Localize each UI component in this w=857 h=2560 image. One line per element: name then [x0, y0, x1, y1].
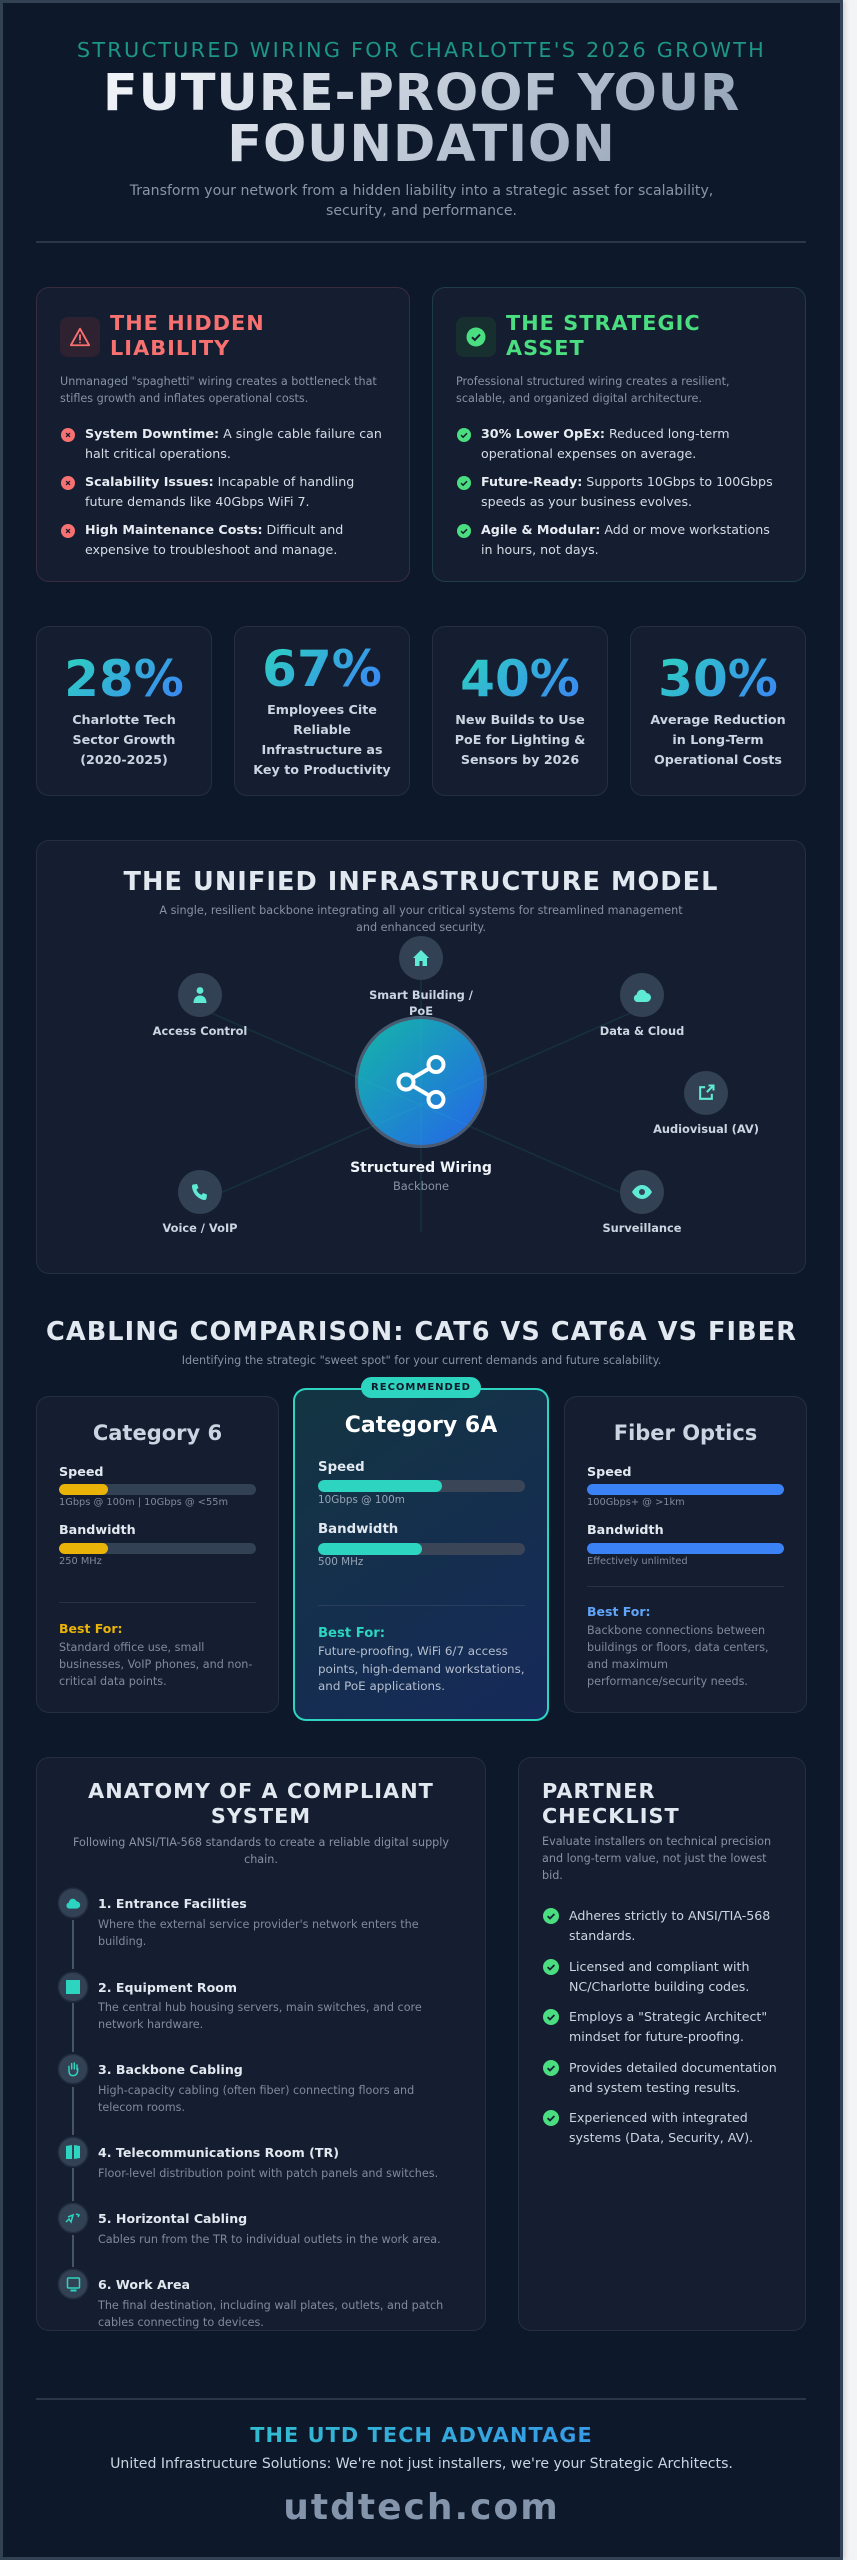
- step text: cables connecting to devices.: [98, 2316, 264, 2328]
- stat card: 67%: [234, 626, 410, 796]
- description: [159, 904, 683, 934]
- title: FOUNDATION: [227, 115, 616, 174]
- panel: unified infrastructure model: [36, 840, 806, 1274]
- checklist item: [569, 1957, 749, 1997]
- heading: PARTNER: [542, 1779, 656, 1803]
- bullet: [85, 426, 382, 460]
- description: [542, 1832, 771, 1884]
- step text: Floor-level distribution point with patch panels and switches.: [98, 2166, 438, 2180]
- icon: x: [61, 428, 75, 442]
- icon: x: [61, 524, 75, 538]
- icon: monitor: [59, 2270, 87, 2298]
- bandwidth label: Bandwidth: [59, 1522, 136, 1537]
- step title: 2. Equipment Room: [98, 1980, 237, 1994]
- label: Employees Cite: [267, 702, 377, 716]
- icon: check: [543, 1908, 559, 1924]
- description: Evaluate installers on technical precision: [542, 1834, 771, 1848]
- heading: SYSTEM: [211, 1804, 311, 1828]
- icon: check: [457, 524, 471, 538]
- step text: Cables run from the TR to individual outlets in the work area.: [98, 2232, 441, 2246]
- icon: check: [543, 1959, 559, 1975]
- panel: partner checklist: [518, 1757, 806, 2331]
- label: Infrastructure as: [261, 742, 382, 756]
- icon: book: [59, 2138, 87, 2166]
- bullet: operational expenses on average.: [481, 446, 696, 460]
- bandwidth bar: [318, 1543, 525, 1555]
- step 5: [36, 2204, 486, 2249]
- bullet: expensive to troubleshoot and manage.: [85, 542, 337, 556]
- bullet: in hours, not days.: [481, 542, 599, 556]
- hub sublabel: Backbone: [393, 1179, 449, 1193]
- checklist item: systems (Data, Security, AV).: [569, 2130, 753, 2145]
- checklist item: NC/Charlotte building codes.: [569, 1979, 749, 1994]
- label: Charlotte Tech: [72, 712, 176, 726]
- best for text: [587, 1624, 769, 1688]
- card: category 6A: [293, 1388, 549, 1721]
- label: Data & Cloud: [600, 1024, 684, 1038]
- bullet: halt critical operations.: [85, 446, 231, 460]
- bullet: [481, 426, 730, 460]
- label: Surveillance: [602, 1221, 682, 1235]
- number: 67%: [262, 640, 382, 698]
- number: 40%: [460, 650, 580, 708]
- checklist item: Experienced with integrated: [569, 2110, 748, 2125]
- best for label: Best For:: [318, 1626, 385, 1640]
- bullet: [85, 522, 343, 556]
- icon: sparkle cable: [59, 2204, 87, 2232]
- best for text: points, high-demand workstations,: [318, 1662, 525, 1676]
- bandwidth label: Bandwidth: [587, 1522, 664, 1537]
- node: data and cloud: [600, 973, 684, 1038]
- description: Following ANSI/TIA-568 standards to create a reliable digital supply: [73, 1836, 449, 1848]
- stat card: 28%: [36, 626, 212, 796]
- label: Audiovisual (AV): [653, 1122, 759, 1136]
- panel: anatomy of a compliant system: [36, 1757, 486, 2331]
- description: bid.: [542, 1868, 563, 1882]
- label: [650, 712, 786, 766]
- label: (2020-2025): [80, 752, 168, 766]
- footer tagline: United Infrastructure Solutions: We're not just installers, we're your Strategic Architects.: [110, 2456, 733, 2472]
- label: [72, 712, 176, 766]
- best for text: businesses, VoIP phones, and non-: [59, 1658, 252, 1670]
- icon: eye: [620, 1170, 664, 1214]
- step text: The central hub housing servers, main switches, and core: [98, 2000, 422, 2014]
- card: category 6: [36, 1396, 279, 1713]
- panel: the strategic asset: [432, 287, 806, 582]
- description: scalable, and organized digital architecture.: [456, 392, 702, 404]
- description: stifles growth and inflates operational costs.: [60, 392, 308, 404]
- best for text: buildings or floors, data centers,: [587, 1640, 769, 1654]
- label: [253, 702, 391, 776]
- icon: check: [543, 2110, 559, 2126]
- stat card: 30%: [630, 626, 806, 796]
- checklist item: Employs a "Strategic Architect": [569, 2009, 767, 2024]
- heading: [506, 310, 701, 360]
- section heading: cabling comparison: CABLING COMPARISON: CAT6 VS CAT6A VS FIBER: [46, 1317, 797, 1347]
- best for label: Best For:: [59, 1621, 123, 1636]
- step text: telecom rooms.: [98, 2100, 185, 2114]
- icon: x: [61, 476, 75, 490]
- best for text: and PoE applications.: [318, 1679, 445, 1693]
- footer heading: THE UTD TECH ADVANTAGE: [250, 2423, 593, 2447]
- step text: building.: [98, 1934, 146, 1948]
- node: smart building: [369, 936, 473, 1018]
- speed label: Speed: [587, 1464, 632, 1478]
- panel: the hidden liability: [36, 287, 410, 582]
- step 6: [36, 2270, 486, 2328]
- heading: [110, 310, 265, 360]
- checklist item: [569, 2007, 767, 2047]
- speed label: Speed: [59, 1464, 104, 1478]
- best for text: Future-proofing, WiFi 6/7 access: [318, 1644, 508, 1658]
- description: and long-term value, not just the lowest: [542, 1852, 767, 1864]
- checklist item: Licensed and compliant with: [569, 1959, 749, 1974]
- stat card: 40%: [432, 626, 608, 796]
- card title: Category 6: [93, 1421, 222, 1445]
- hub label: Structured Wiring: [350, 1160, 492, 1176]
- checklist item: standards.: [569, 1928, 635, 1943]
- bullet: future demands like 40Gbps WiFi 7.: [85, 494, 310, 508]
- hub circle: [355, 1016, 487, 1148]
- description: [60, 374, 377, 404]
- step title: 6. Work Area: [98, 2276, 190, 2292]
- label: Access Control: [153, 1024, 247, 1038]
- heading: [542, 1779, 680, 1829]
- card title: Fiber Optics: [614, 1421, 757, 1445]
- icon: check: [456, 317, 496, 357]
- label: Voice / VoIP: [162, 1221, 238, 1235]
- subtitle: security, and performance.: [326, 202, 517, 218]
- step text: [98, 2082, 414, 2116]
- description: A single, resilient backbone integrating all your critical systems for streamlined management: [159, 904, 683, 916]
- label: [455, 712, 585, 766]
- step text: [98, 2296, 443, 2330]
- icon: square: [59, 1973, 87, 2001]
- description: and enhanced security.: [356, 920, 486, 934]
- label: [369, 988, 473, 1018]
- node: voice: [162, 1170, 238, 1235]
- step text: [98, 1998, 422, 2032]
- bullet: Future-Ready: Supports 10Gbps to 100Gbps: [481, 474, 773, 488]
- checklist item: Provides detailed documentation: [569, 2060, 777, 2075]
- icon: cloud: [59, 1889, 87, 1917]
- bullet: Agile & Modular: Add or move workstations: [481, 522, 770, 536]
- step text: High-capacity cabling (often fiber) connecting floors and: [98, 2084, 414, 2096]
- description: [73, 1836, 449, 1866]
- bandwidth label: Bandwidth: [318, 1522, 398, 1537]
- label: Operational Costs: [654, 752, 782, 766]
- bandwidth bar: [587, 1543, 784, 1554]
- checklist item: and system testing results.: [569, 2080, 740, 2095]
- checklist item: [569, 2058, 777, 2098]
- speed bar: [318, 1480, 525, 1492]
- step 2: [36, 1973, 486, 2033]
- eyebrow: STRUCTURED WIRING FOR CHARLOTTE'S 2026 GROWTH: [77, 38, 766, 62]
- heading: ANATOMY OF A COMPLIANT: [88, 1779, 434, 1803]
- speed note: 1Gbps @ 100m | 10Gbps @ <55m: [59, 1497, 228, 1508]
- label: Key to Productivity: [253, 762, 391, 776]
- step text: [98, 1916, 419, 1950]
- footer website: utdtech.com: [283, 2487, 560, 2528]
- step title: 1. Entrance Facilities: [98, 1896, 247, 1911]
- best for text: Backbone connections between: [587, 1624, 765, 1636]
- footer heading: [3, 2421, 840, 2449]
- bullet: Scalability Issues: Incapable of handling: [85, 474, 354, 488]
- heading: [88, 1779, 434, 1828]
- label: Sensors by 2026: [461, 752, 579, 766]
- icon: cloud: [620, 973, 664, 1017]
- icon: phone: [178, 1170, 222, 1214]
- badge: recommended: [361, 1377, 481, 1398]
- heading: LIABILITY: [110, 336, 230, 360]
- node: surveillance: [602, 1170, 682, 1235]
- bullet: High Maintenance Costs: Difficult and: [85, 522, 343, 536]
- speed bar: [587, 1484, 784, 1495]
- heading: THE STRATEGIC: [506, 310, 701, 334]
- bullet: [85, 474, 354, 508]
- title: [3, 68, 840, 170]
- description: Professional structured wiring creates a resilient,: [456, 374, 730, 388]
- node: access control: [152, 973, 247, 1038]
- icon: home: [399, 936, 443, 980]
- icon: check: [543, 2009, 559, 2025]
- step 1: [58, 1888, 419, 1948]
- step text: The final destination, including wall plates, outlets, and patch: [98, 2298, 443, 2312]
- number: 28%: [64, 650, 184, 708]
- description: chain.: [244, 1852, 278, 1866]
- description: Unmanaged "spaghetti" wiring creates a bottleneck that: [60, 374, 377, 388]
- speed label: Speed: [318, 1460, 365, 1475]
- label: New Builds to Use: [455, 712, 585, 726]
- card: fiber optics: [564, 1396, 807, 1713]
- icon: check: [457, 476, 471, 490]
- checklist item: [569, 2108, 753, 2148]
- icon: external link: [684, 1071, 728, 1115]
- badge: recommended: RECOMMENDED: [371, 1382, 471, 1393]
- bandwidth note: Effectively unlimited: [587, 1556, 688, 1567]
- checklist item: [569, 1906, 770, 1946]
- step title: 4. Telecommunications Room (TR): [98, 2144, 339, 2160]
- icon: person: [178, 973, 222, 1017]
- bullet: 30% Lower OpEx: Reduced long-term: [481, 426, 730, 440]
- label: Reliable: [293, 722, 351, 736]
- speed bar: [59, 1484, 256, 1495]
- label: in Long-Term: [672, 732, 764, 746]
- step text: network hardware.: [98, 2018, 203, 2030]
- step 4: [36, 2138, 486, 2183]
- best for text: performance/security needs.: [587, 1674, 748, 1688]
- heading: THE UNIFIED INFRASTRUCTURE MODEL: [124, 867, 718, 897]
- best for text: Standard office use, small: [59, 1640, 204, 1654]
- card title: Category 6A: [345, 1413, 497, 1438]
- bandwidth note: 250 MHz: [59, 1556, 102, 1567]
- bullet: System Downtime: A single cable failure can: [85, 426, 382, 440]
- subtitle: [130, 182, 713, 218]
- description: [456, 374, 730, 404]
- heading: THE HIDDEN: [110, 310, 265, 334]
- step 3: [36, 2055, 486, 2115]
- bandwidth note: 500 MHz: [318, 1556, 363, 1568]
- checklist item: mindset for future-proofing.: [569, 2029, 744, 2044]
- icon: check: [457, 428, 471, 442]
- checklist item: Adheres strictly to ANSI/TIA-568: [569, 1908, 770, 1923]
- best for text: [318, 1644, 525, 1693]
- icon: check: [543, 2060, 559, 2076]
- connector lines: [212, 980, 630, 1232]
- speed note: 10Gbps @ 100m: [318, 1494, 405, 1506]
- number: 30%: [658, 650, 778, 708]
- title: FUTURE-PROOF YOUR: [103, 64, 740, 123]
- step text: Where the external service provider's network enters the: [98, 1918, 419, 1930]
- label: PoE: [409, 1004, 433, 1018]
- bullet: [481, 522, 770, 556]
- label: PoE for Lighting &: [455, 732, 585, 746]
- best for text: and maximum: [587, 1658, 668, 1670]
- label: Smart Building /: [369, 988, 473, 1002]
- label: Average Reduction: [650, 712, 786, 726]
- icon: warning: [60, 317, 100, 357]
- best for text: [59, 1640, 252, 1688]
- label: Sector Growth: [73, 732, 175, 746]
- best for text: critical data points.: [59, 1674, 167, 1688]
- speed note: 100Gbps+ @ >1km: [587, 1497, 685, 1508]
- bullet: [481, 474, 773, 508]
- heading: CHECKLIST: [542, 1804, 680, 1828]
- bullet: speeds as your business evolves.: [481, 494, 692, 508]
- node: audiovisual: [653, 1071, 759, 1136]
- step title: 5. Horizontal Cabling: [98, 2210, 247, 2226]
- subtitle: Transform your network from a hidden liability into a strategic asset for scalability,: [130, 182, 713, 198]
- icon: hand: [59, 2055, 87, 2083]
- heading: ASSET: [506, 336, 585, 360]
- best for label: Best For:: [587, 1604, 651, 1619]
- step title: 3. Backbone Cabling: [98, 2062, 243, 2076]
- section description: Identifying the strategic "sweet spot" for your current demands and future scalability.: [182, 1354, 661, 1366]
- bandwidth bar: [59, 1543, 256, 1554]
